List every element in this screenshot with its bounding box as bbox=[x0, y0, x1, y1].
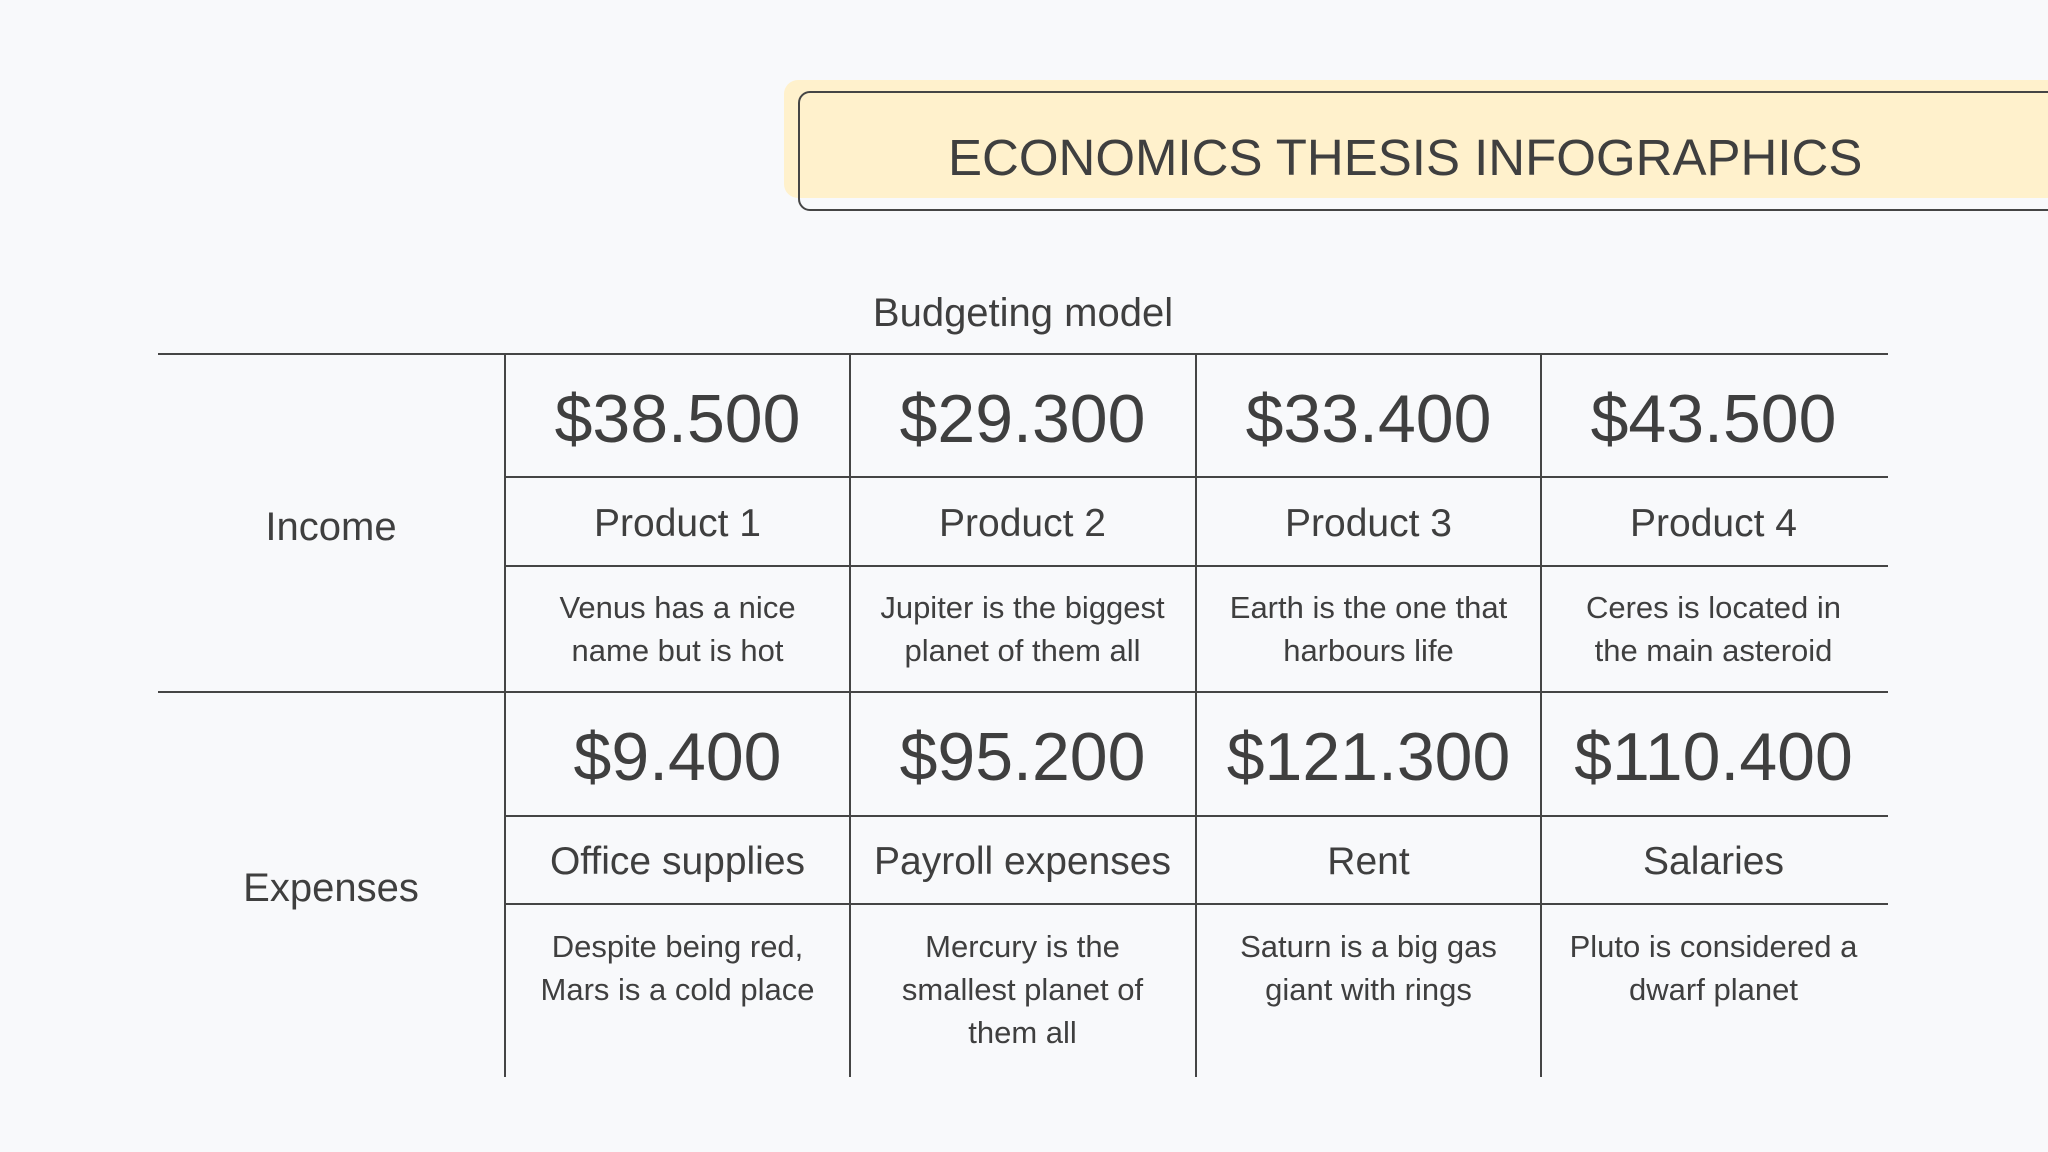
income product names: Product 3 bbox=[1285, 502, 1452, 544]
expense names: Office supplies bbox=[550, 840, 805, 883]
income descriptions: planet of them all bbox=[904, 633, 1141, 668]
expense values: $95.200 bbox=[900, 719, 1145, 795]
expense names: Salaries bbox=[1643, 840, 1784, 883]
income descriptions: harbours life bbox=[1283, 633, 1454, 668]
subtitle: Budgeting model: Budgeting model bbox=[873, 290, 1173, 334]
income values: $43.500 bbox=[1591, 380, 1836, 456]
income descriptions: Jupiter is the biggest bbox=[880, 590, 1165, 625]
expense values: $121.300 bbox=[1227, 719, 1510, 795]
expense descriptions bbox=[541, 929, 1858, 1050]
income product names: Product 1 bbox=[594, 502, 761, 544]
expense descriptions: Pluto is considered a bbox=[1570, 929, 1857, 964]
income product names: Product 2 bbox=[939, 502, 1106, 544]
income values: $29.300 bbox=[900, 380, 1145, 456]
income product names: Product 4 bbox=[1630, 502, 1797, 544]
title banner bbox=[784, 80, 2048, 211]
expense descriptions: dwarf planet bbox=[1629, 972, 1798, 1007]
row label: Expenses: Expenses bbox=[243, 866, 419, 910]
expense values: $110.400 bbox=[1574, 719, 1853, 795]
expense names: Rent bbox=[1327, 840, 1410, 883]
expense descriptions: smallest planet of bbox=[902, 972, 1143, 1007]
income product names bbox=[594, 502, 1797, 544]
expense descriptions: giant with rings bbox=[1265, 972, 1472, 1007]
expense descriptions: them all bbox=[968, 1015, 1077, 1050]
row label: Income: Income bbox=[265, 504, 397, 548]
income descriptions: Ceres is located in bbox=[1586, 590, 1841, 625]
expense descriptions: Despite being red, bbox=[552, 929, 803, 964]
income values: $38.500 bbox=[555, 380, 800, 456]
expense names bbox=[550, 840, 1784, 883]
expense values bbox=[574, 719, 1853, 795]
expense descriptions: Mercury is the bbox=[925, 929, 1120, 964]
income values: $33.400 bbox=[1246, 380, 1491, 456]
expense descriptions: Saturn is a big gas bbox=[1240, 929, 1497, 964]
expense values: $9.400 bbox=[574, 719, 781, 795]
expense descriptions: Mars is a cold place bbox=[541, 972, 814, 1007]
income descriptions: Venus has a nice bbox=[559, 590, 796, 625]
income descriptions: Earth is the one that bbox=[1230, 590, 1507, 625]
title text: ECONOMICS THESIS INFOGRAPHICS bbox=[948, 129, 1862, 186]
income descriptions: the main asteroid bbox=[1595, 633, 1832, 668]
income values bbox=[555, 380, 1836, 456]
income descriptions bbox=[559, 590, 1841, 668]
income descriptions: name but is hot bbox=[572, 633, 783, 668]
expense names: Payroll expenses bbox=[874, 840, 1171, 883]
